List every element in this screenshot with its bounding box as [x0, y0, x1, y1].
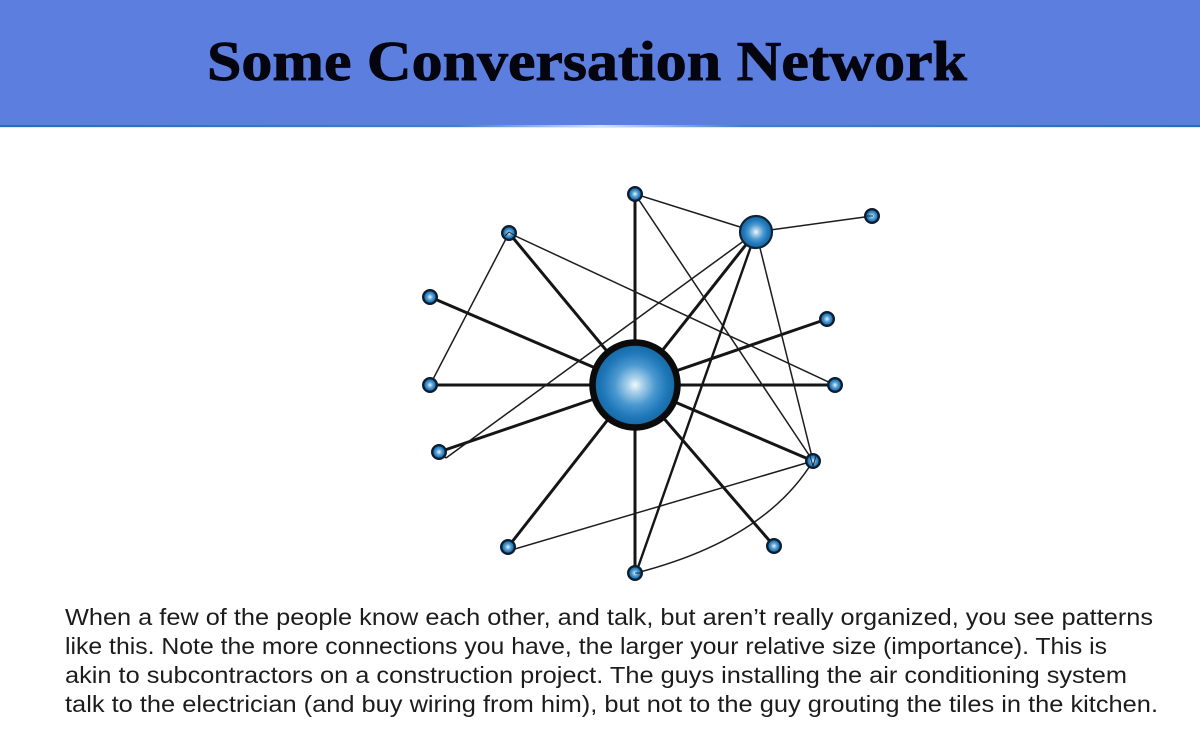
title: Some Conversation Network	[207, 31, 968, 93]
thick edges from central hub	[430, 194, 835, 573]
description text: When a few of the people know each other, and talk, but aren’t really organized, you see patterns	[65, 604, 1153, 630]
description text: akin to subcontractors on a construction project. The guys installing the air conditioning system	[65, 662, 1127, 688]
edge: large node to bottom node	[636, 232, 756, 573]
description text	[65, 604, 1158, 717]
thin edges between outer nodes	[430, 194, 872, 573]
small nodes	[423, 187, 879, 580]
hub node	[592, 342, 678, 428]
description text: like this. Note the more connections you have, the larger your relative size (importance). This is	[65, 633, 1107, 659]
header banner	[0, 0, 1200, 128]
small marks inside nodes	[505, 216, 873, 573]
secondary large node	[740, 216, 772, 248]
network diagram	[423, 187, 879, 580]
description text: talk to the electrician (and buy wiring from him), but not to the guy grouting the tiles in the kitchen.	[65, 691, 1158, 717]
